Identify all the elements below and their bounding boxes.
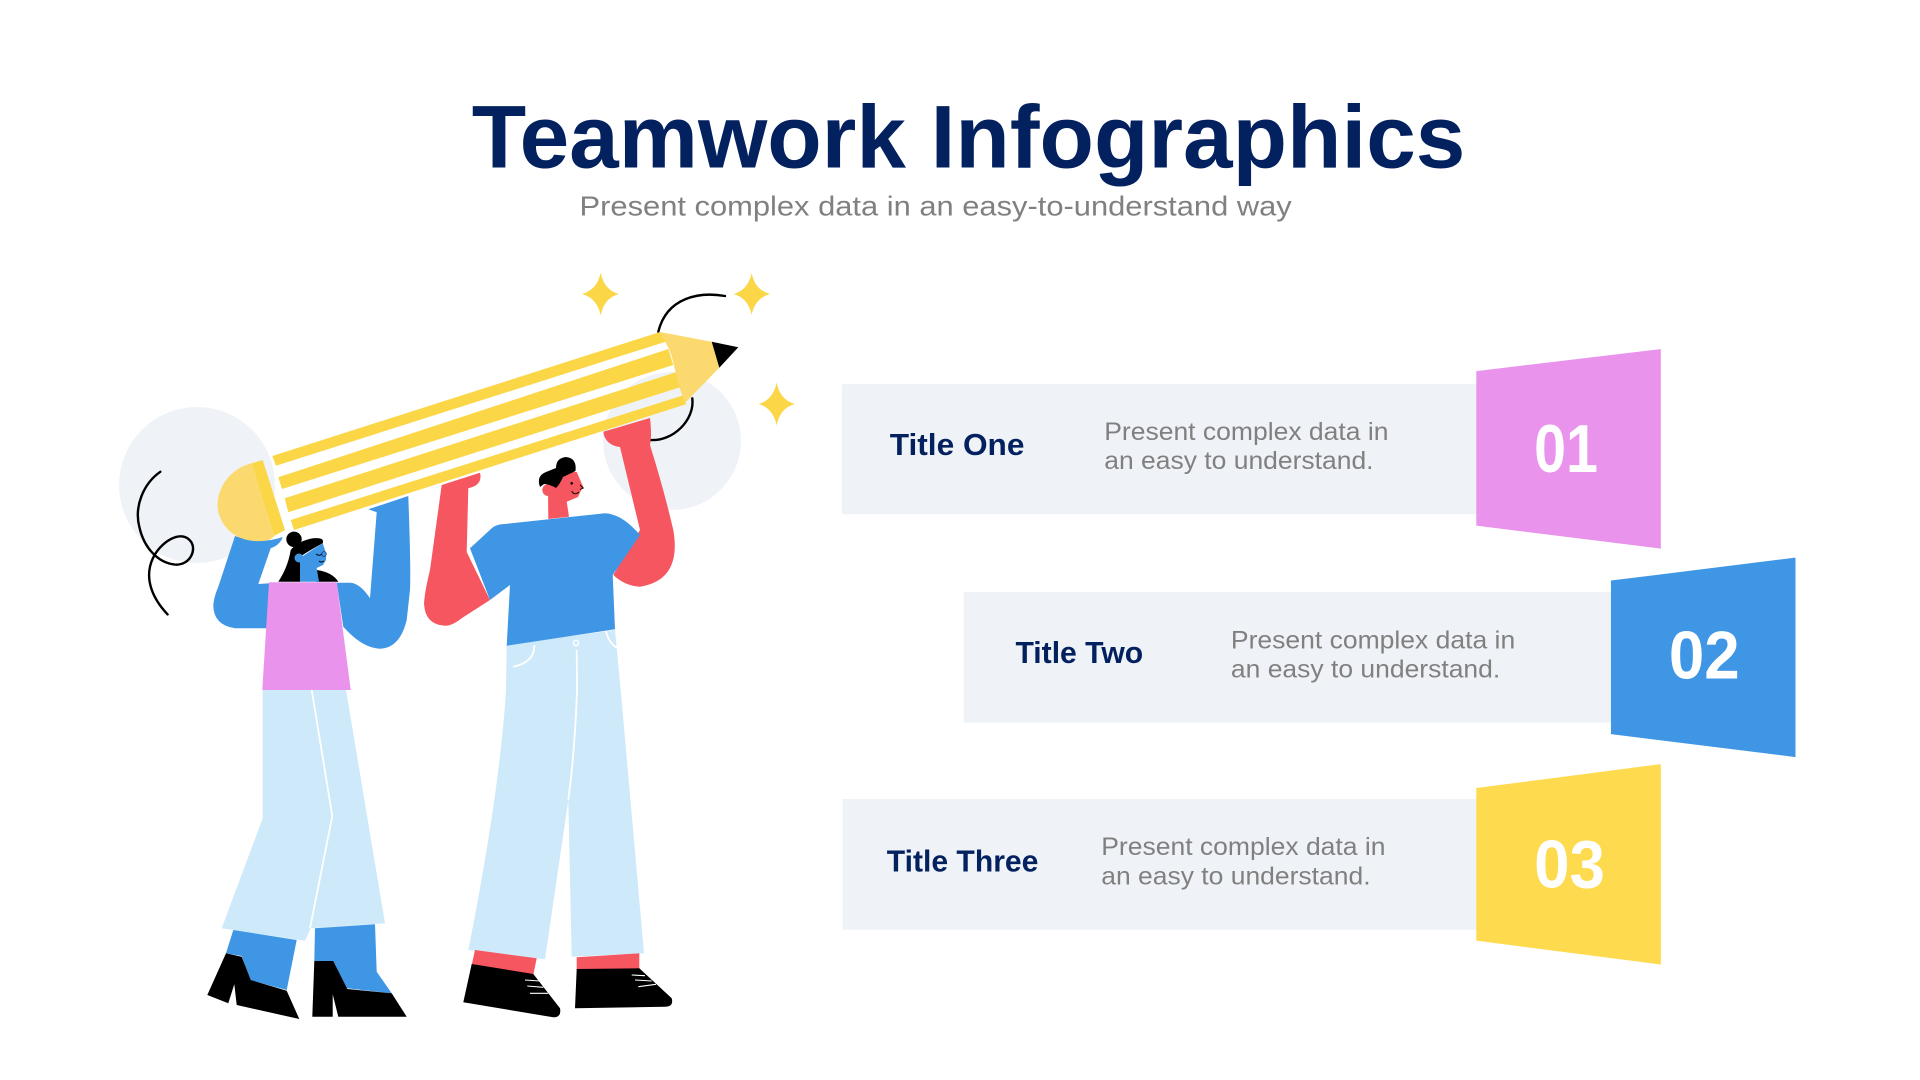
pencil body <box>272 332 686 530</box>
description <box>1231 626 1515 683</box>
man socks and shoes <box>472 950 537 975</box>
title three: Title Three <box>887 843 1038 878</box>
sparkles <box>582 272 795 426</box>
row 3 <box>842 764 1661 965</box>
woman boots <box>226 930 297 990</box>
title one: Title One <box>890 427 1024 462</box>
man trousers <box>468 630 644 959</box>
description: Present complex data in <box>1104 418 1389 446</box>
man shirt <box>470 513 640 646</box>
description: Present complex data in <box>1231 626 1515 654</box>
woman top <box>262 582 351 690</box>
woman trousers <box>222 690 385 941</box>
squiggle lines <box>138 295 725 614</box>
number 02: 02 <box>1669 618 1740 693</box>
woman head <box>278 538 323 582</box>
man arms <box>424 473 490 626</box>
number tab <box>1476 349 1661 549</box>
pencil tip <box>712 342 738 368</box>
subtitle: Present complex data in an easy-to-understand way <box>580 190 1292 221</box>
card background <box>842 384 1480 514</box>
row 1 <box>842 349 1661 549</box>
title two: Title Two <box>1015 635 1143 670</box>
man <box>424 418 675 1017</box>
pencil eraser <box>218 463 274 541</box>
pencil cone <box>660 332 719 403</box>
description <box>1101 833 1386 890</box>
card background <box>842 799 1481 930</box>
description <box>1104 418 1389 475</box>
description: Present complex data in <box>1101 833 1386 861</box>
number tab <box>1476 764 1661 965</box>
woman <box>207 496 410 1019</box>
number 01: 01 <box>1534 412 1598 487</box>
description: an easy to understand. <box>1101 862 1371 890</box>
man head <box>548 472 583 519</box>
description: an easy to understand. <box>1231 655 1500 683</box>
title: Teamwork Infographics <box>472 88 1465 187</box>
description: an easy to understand. <box>1104 447 1374 475</box>
number tab <box>1611 558 1796 757</box>
card background <box>964 592 1616 723</box>
woman arms <box>213 536 283 628</box>
illustration: two people carrying a pencil <box>119 272 795 1019</box>
number 03: 03 <box>1534 827 1605 902</box>
pencil <box>218 332 738 541</box>
row 2 <box>964 558 1796 757</box>
background circles <box>119 372 741 563</box>
